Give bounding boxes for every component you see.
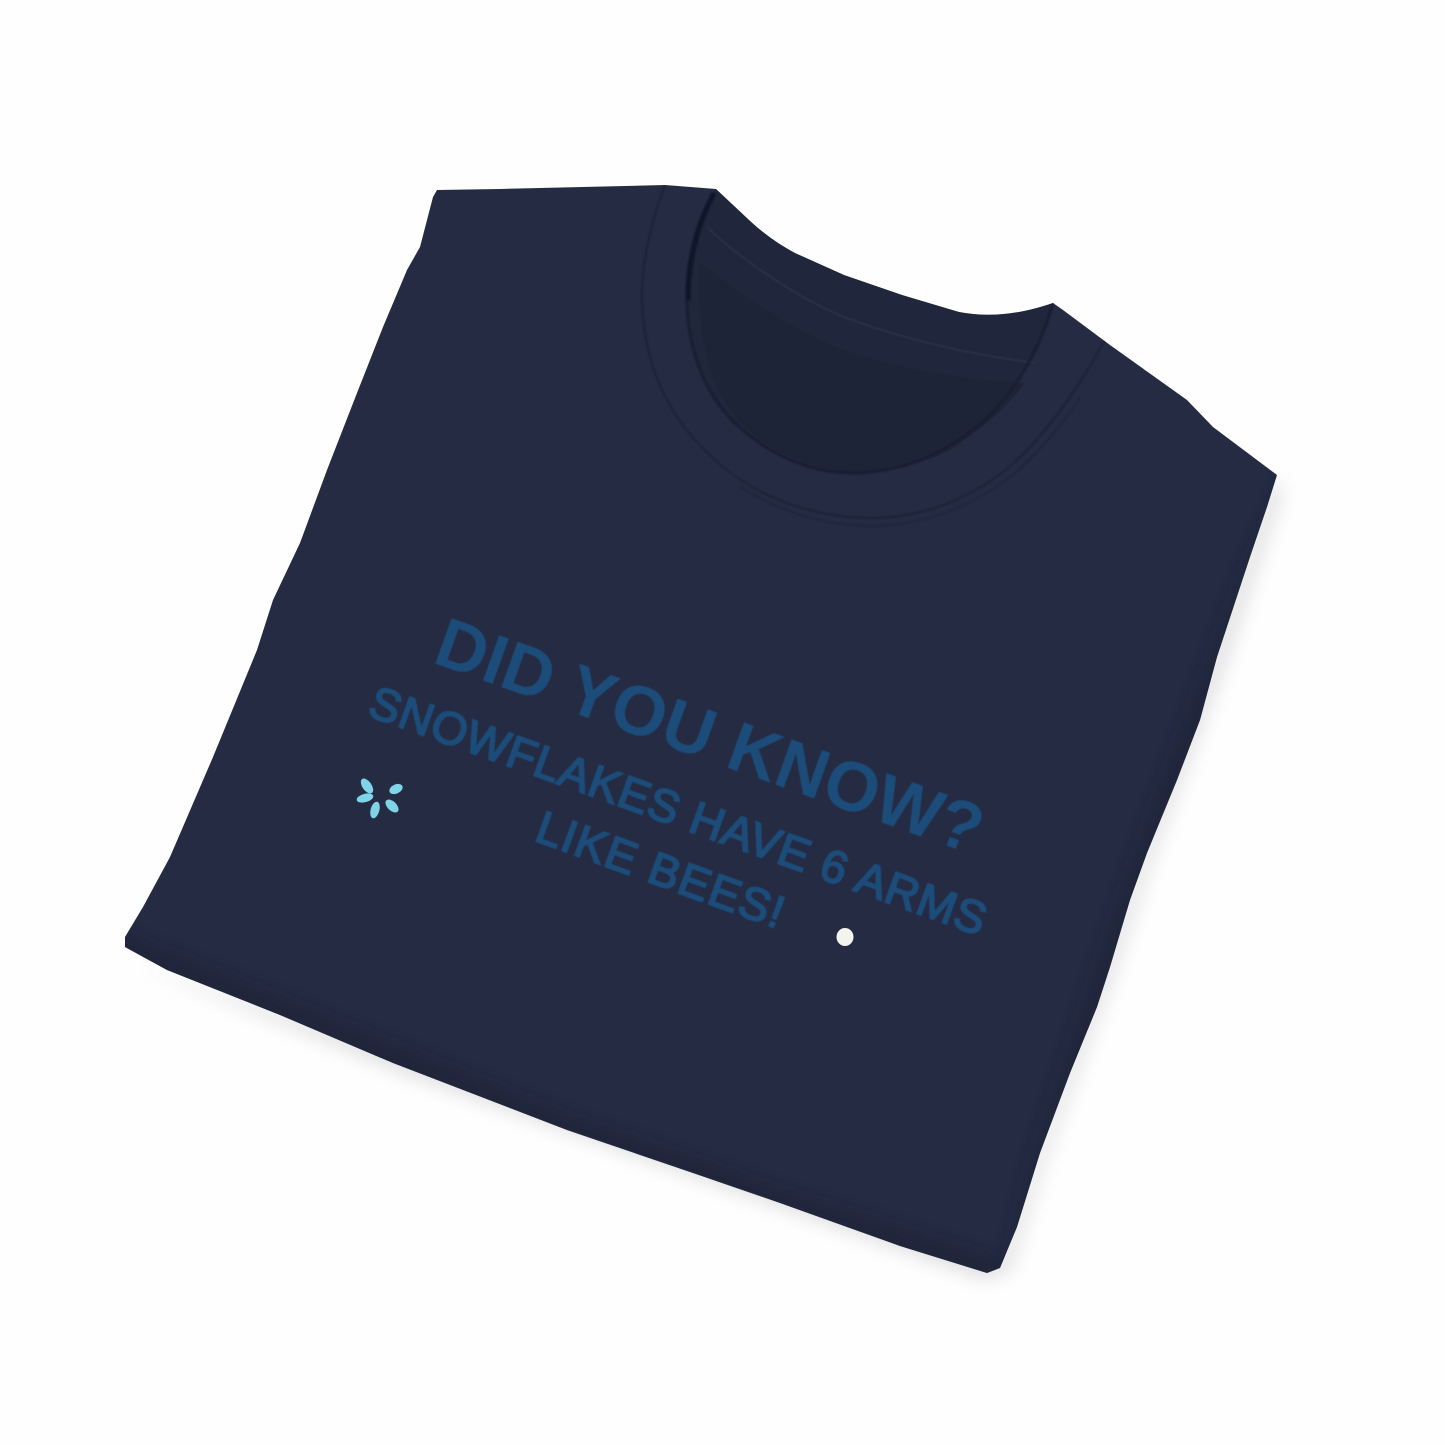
icon: snowflake fragment (356, 776, 404, 819)
back neck band and inner neck (687, 189, 1053, 473)
front neck rib collar (642, 185, 1105, 526)
text line: like bees: LIKE BEES! (530, 801, 792, 938)
shirt body (125, 185, 1277, 1273)
printed headline (363, 603, 994, 945)
shaded bottom edge of fold (125, 932, 1002, 1273)
text line: snowflakes have 6 arms: SNOWFLAKES HAVE 6 ARMS (363, 675, 994, 945)
inner neck lower shadow (913, 383, 1024, 464)
shaded right edge of fold (1002, 518, 1264, 1264)
product photo: folded navy t-shirt (125, 185, 1286, 1284)
back neck seam (707, 227, 1036, 363)
title: did you know: DID YOU KNOW? (426, 603, 994, 869)
icon: white dot (836, 928, 854, 946)
cast shadow under shirt (140, 480, 1283, 1280)
